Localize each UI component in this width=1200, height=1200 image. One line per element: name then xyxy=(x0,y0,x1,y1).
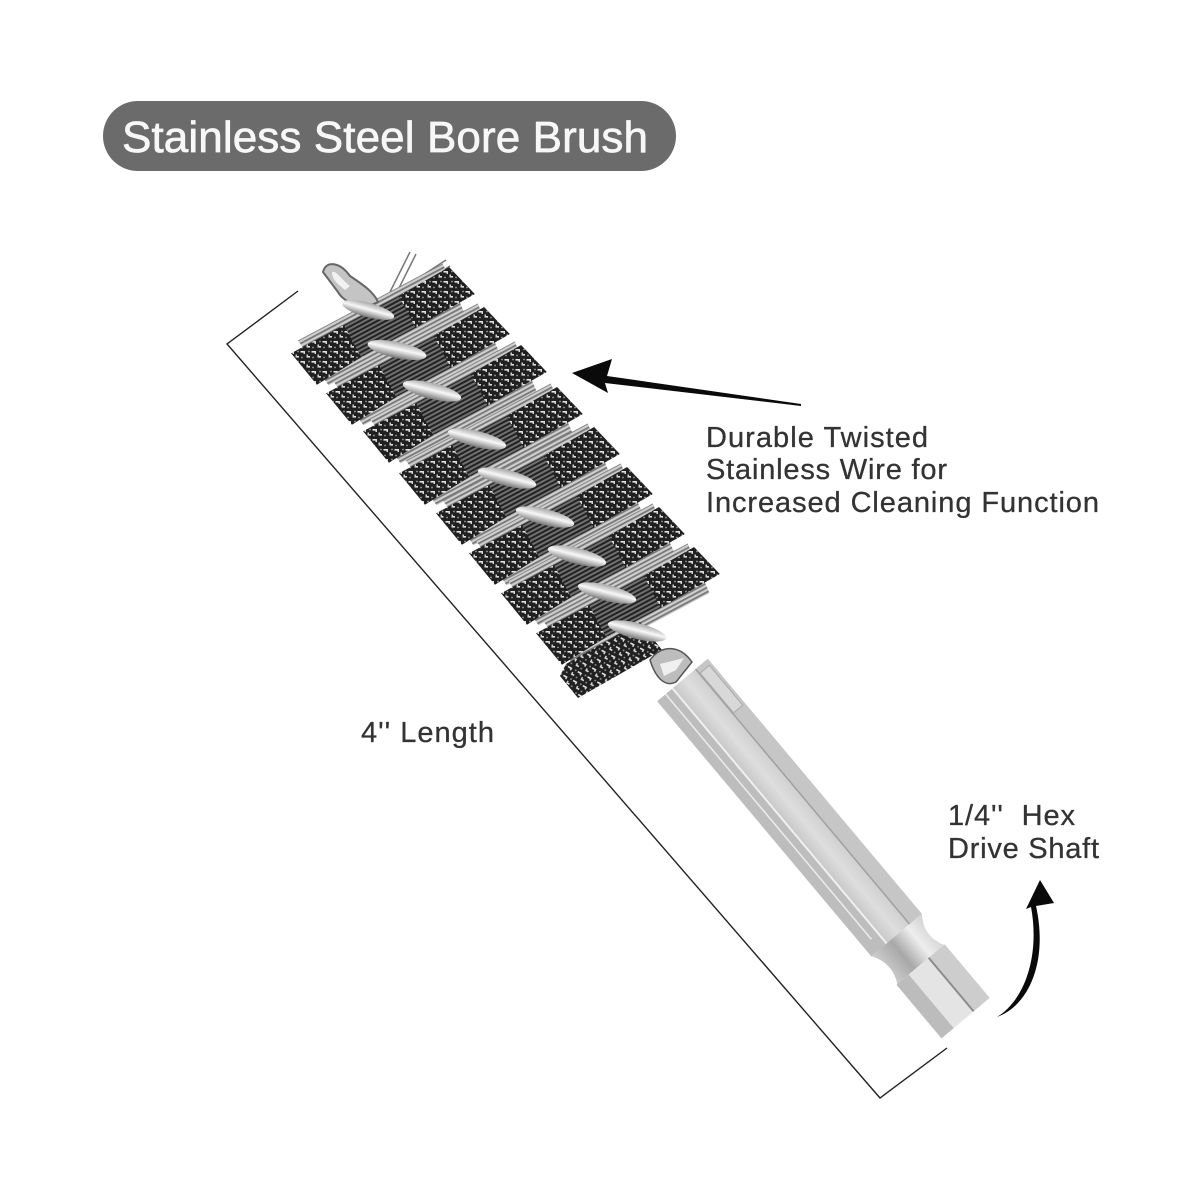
callout: durable twisted wire: Stainless Wire for xyxy=(706,454,947,486)
stray wires at brush tip xyxy=(390,252,450,296)
callout: durable twisted wire: Increased Cleaning Function xyxy=(706,487,1099,519)
callout: hex drive shaft: Drive Shaft xyxy=(948,833,1099,865)
arrow: to hex shaft label xyxy=(997,880,1054,1017)
callout: durable twisted wire xyxy=(706,422,1099,519)
hex drive shaft xyxy=(657,659,991,1039)
shaft body xyxy=(657,659,922,956)
callout: hex drive shaft: 1/4'' Hex xyxy=(948,800,1076,832)
label: length: 4'' Length xyxy=(361,717,494,749)
bristle tufts xyxy=(287,257,725,698)
arrow: to bristles xyxy=(572,359,801,406)
callout: hex drive shaft xyxy=(948,800,1099,865)
title pill xyxy=(103,101,676,171)
neck xyxy=(871,914,946,985)
hex tip xyxy=(929,944,990,1011)
twisted wire core xyxy=(323,264,692,684)
dimension bracket: length xyxy=(227,291,947,1098)
callout: durable twisted wire: Durable Twisted xyxy=(706,422,928,454)
title pill: Stainless Steel Bore Brush xyxy=(122,113,648,162)
brush head with bristles xyxy=(287,252,725,698)
